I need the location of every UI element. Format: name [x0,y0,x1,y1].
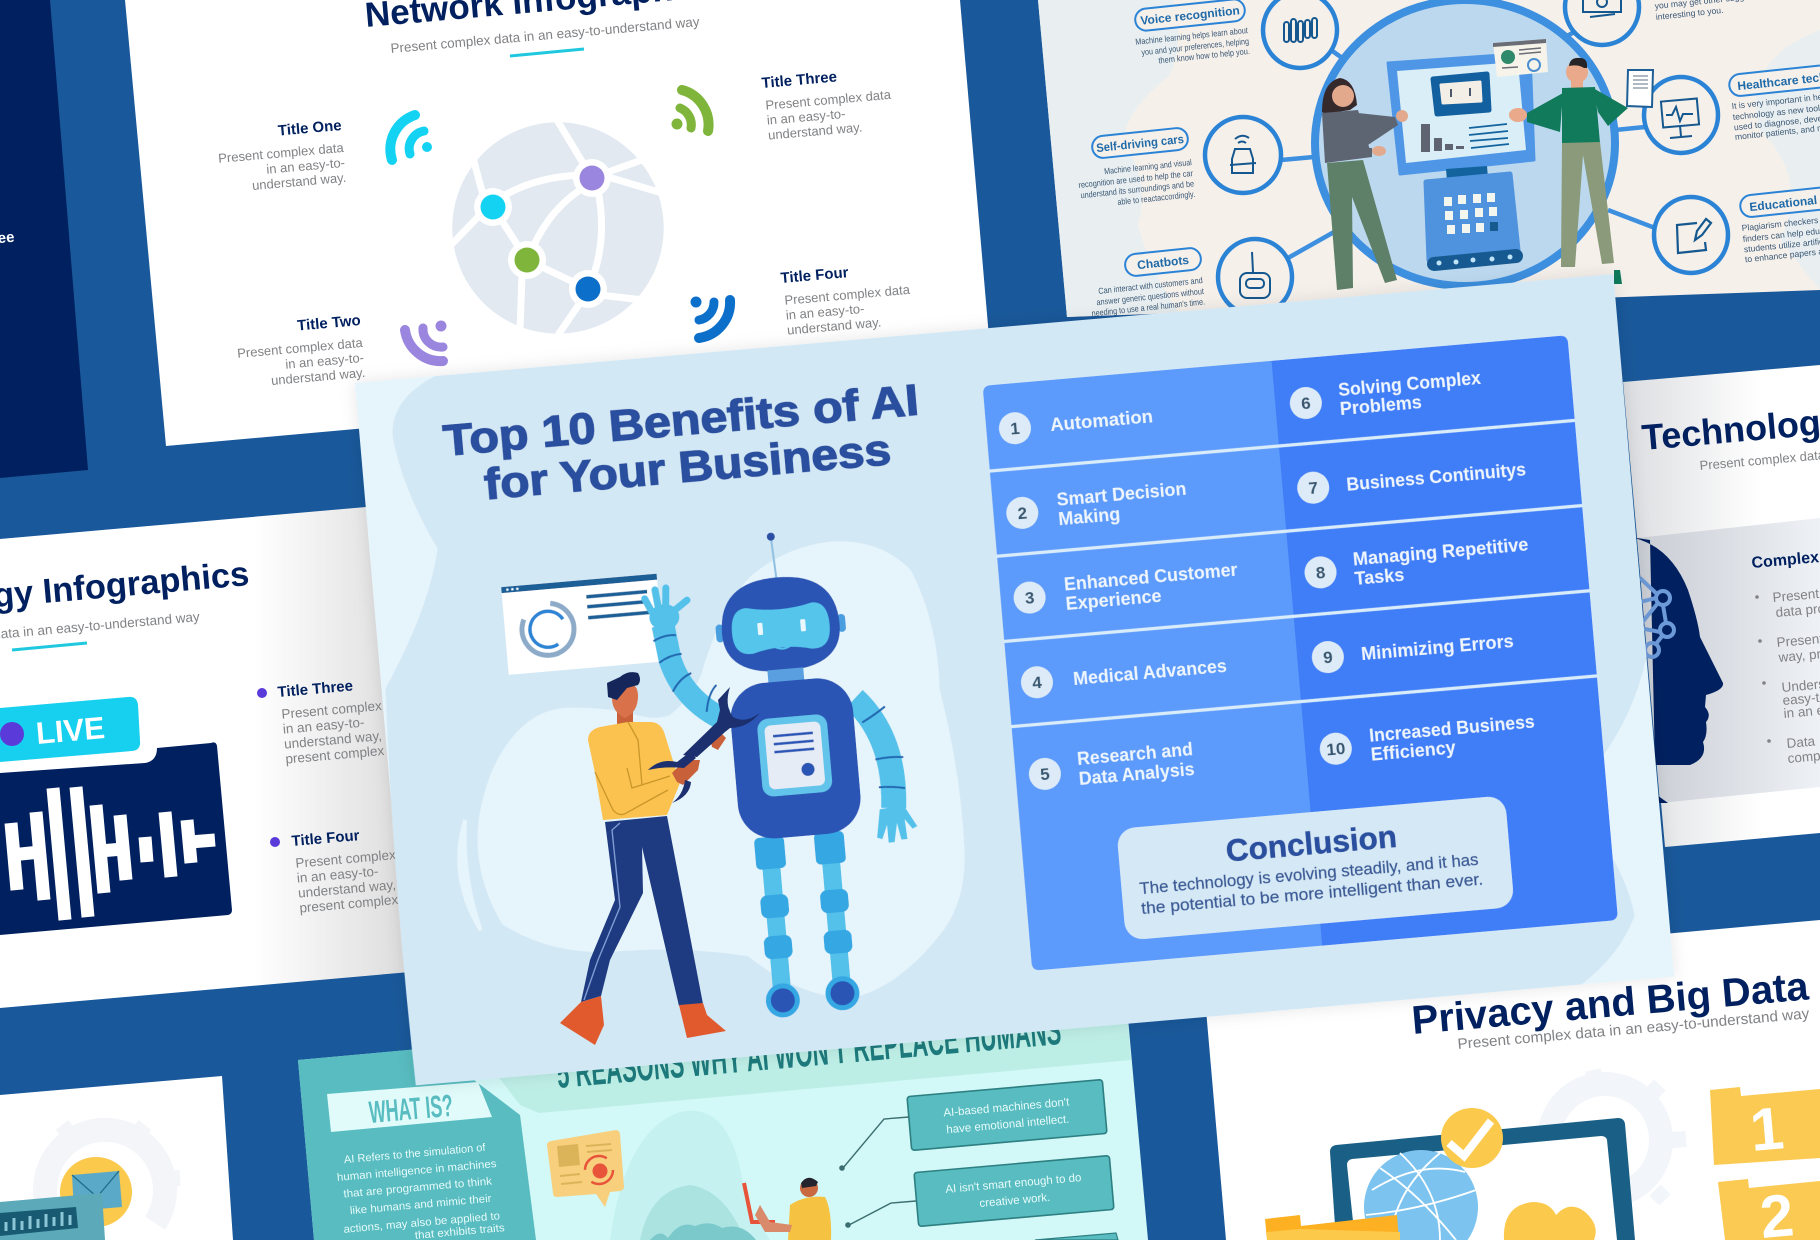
icon: gear [45,1125,180,1223]
text block: title four: understand way. [786,314,882,338]
item 7: Business Continuitys [1346,459,1527,495]
connectors [1281,30,1655,258]
icon: chatbot [1218,239,1292,315]
text block: title one: understand way. [251,170,347,193]
text block: title four left [270,821,431,916]
label: what is [327,1082,492,1132]
label: what is: WHAT IS? [368,1088,454,1130]
text block: title two: Title Two [296,312,361,335]
main circle [1315,0,1615,286]
item 6: Solving Complex [1337,368,1482,400]
item 5 [1027,739,1195,793]
callout: creative work: creative work. [979,1192,1051,1210]
globe [1364,1150,1478,1240]
text block: what is: like humans and mimic their [349,1193,492,1217]
accent underline [510,49,584,56]
panel: bottom left slide [0,1076,233,1240]
text block: title three: understand way. [767,119,863,143]
icon: laptop with globe [1330,1118,1635,1240]
text: self-driving body [1077,157,1196,211]
panel: network infographic slide [125,0,992,446]
text: self-driving body: recognition are used to help the car [1078,168,1193,190]
text block: title three left: in an easy-to- [282,715,365,737]
label: chatbots [1124,247,1202,277]
icon: small folder [1265,1215,1400,1240]
upper hand [710,732,726,750]
text block: title one [216,117,348,196]
item 4 [1020,650,1228,700]
icon: cyan signal [390,115,432,160]
subtitle: network: Present complex data in an easy-to-understand way [390,14,700,56]
item 8: Tasks [1354,565,1405,589]
item 2: Making [1058,504,1121,529]
label: healthcare technology [1728,61,1820,97]
text block: title two: in an easy-to- [285,350,364,372]
item 2 [1005,479,1189,534]
panel: technology infographics slide left [0,507,431,1008]
heart [1504,1202,1596,1240]
label: chatbots: Chatbots [1136,253,1190,272]
text: chatbots body [1089,275,1206,318]
text block: title three: Title Three [761,68,838,92]
panel: main infographic card [353,274,1674,1086]
text block: title three: in an easy-to- [766,106,846,128]
item 2: 2 [1017,504,1028,523]
illustration: person with laptop [744,1178,831,1240]
cloud dark [650,1223,756,1240]
panel: privacy and big data slide [1203,920,1820,1240]
text: recommendation body [1654,0,1790,22]
item 2: Smart Decision [1056,479,1187,510]
folder: number 2 [1718,1179,1820,1240]
text block: title four left: in an easy-to- [296,864,379,886]
text: self-driving body: understand its surroundings and be [1080,178,1195,200]
callout: conclusion [1116,795,1515,941]
badge: live: LIVE [35,710,106,751]
illustration backdrop blob [454,532,977,1029]
item 9 [1311,625,1515,674]
item 7: 7 [1308,478,1319,498]
item 1: 1 [1009,419,1021,439]
text: voice recognition body: you and your preferences, helping [1141,36,1250,57]
text: self-driving body: Machine learning and visual [1104,157,1192,176]
callout: conclusion: The technology is evolving steadily, and it has [1139,851,1479,898]
title [441,376,925,512]
text block: title four: Present complex data [784,282,911,308]
item 10: Increased Business [1368,712,1535,746]
text: chatbots body: answer generic questions without [1096,286,1205,307]
icon: check badge [1441,1108,1503,1168]
text block: title four [780,259,914,338]
icon: education pen [1654,197,1728,273]
icon: recommendation tv [1565,0,1639,45]
text block: title four: Title Four [780,264,849,287]
text: voice recognition body: Machine learning helps learn about [1135,25,1249,47]
icon: head silhouette [1630,537,1723,803]
icon: audio wave panel [0,742,232,935]
icon: gear [1549,1070,1686,1200]
left shoe [560,996,604,1045]
illustration: dashboard card [501,574,664,675]
icon: idea card [547,1130,624,1207]
item 4: Medical Advances [1072,656,1228,689]
text: voice recognition body [1135,25,1251,68]
title: Top 10 Benefits of AI [441,376,921,466]
wrench [648,687,760,803]
icon: blue signal [690,296,730,338]
text block: title three: Present complex data [765,87,892,113]
callout: creative work: AI isn't smart enough to do [945,1172,1082,1196]
label: voice recognition [1134,0,1246,32]
callout: third reason [1035,1233,1118,1240]
item 5: 5 [1039,765,1050,784]
badge: live [0,697,140,762]
text: chatbots body: Can interact with customers and [1098,275,1203,296]
hair [607,672,640,700]
side column [298,1045,536,1240]
label: self-driving cars: Self-driving cars [1096,132,1185,155]
item 1 [998,400,1154,446]
text block: title three left: present complex data [285,740,415,767]
header band [474,985,1131,1113]
text block: title one: Title One [277,117,342,140]
item 5: Data Analysis [1078,759,1195,789]
label: voice recognition: Voice recognition [1140,3,1240,28]
text block: what is [337,1142,506,1240]
text: self-driving body: able to reactaccordingly. [1117,189,1196,207]
text block: title four left: Present complex data [295,844,427,871]
item 8: 8 [1315,563,1326,583]
subtitle: privacy: Present complex data in an easy-to-understand way [1457,1005,1811,1053]
panel: navy slide far left [0,0,88,478]
item 3: Experience [1065,586,1162,614]
illustration: kiosk robot [1388,39,1548,266]
face [612,683,638,718]
text block: title two [235,312,367,391]
icon: mail badge [60,1157,132,1227]
text block: what is: that are programmed to think [343,1175,493,1200]
heading: privacy: Privacy and Big Data [1410,964,1811,1043]
text block: complex list: Data [1786,734,1816,751]
text block: title three left: Present complex data [281,695,413,722]
item 6: Problems [1339,392,1423,419]
item 3: 3 [1024,588,1035,608]
chart: teal bar panel [0,1193,105,1240]
text block: complex list: Complex [1751,549,1820,572]
panel: benefits list [982,335,1618,971]
icon: network globe [451,120,664,335]
callout: emotional intellect: have emotional intellect. [946,1114,1070,1136]
item 6 [1288,368,1483,423]
illustration: man [1509,58,1653,284]
text block: complex list [1751,549,1820,766]
item 10: Efficiency [1370,737,1456,765]
text: recommendation body: interesting to you. [1655,5,1724,22]
decorative hills [610,1111,770,1240]
illustration: person with wrench [560,672,760,1045]
sweater folds [595,722,670,815]
callout: emotional intellect: AI-based machines don't [943,1096,1071,1120]
label: educational tools [1739,185,1820,218]
text block: title four left: Title Four [291,827,360,850]
text: healthcare body [1731,90,1820,142]
text: education body [1741,213,1820,264]
robot hand raised [644,586,689,632]
lower hand [672,760,700,785]
callout: emotional intellect [839,1080,1107,1171]
trousers [581,816,703,1006]
heading: reasons: 5 REASONS WHY AI WON'T REPLACE HUMANS [555,1006,1063,1097]
text block: title three left: Title Three [277,677,354,701]
item 10 [1318,712,1537,769]
text block: title four: in an easy-to- [785,301,865,323]
item 6: 6 [1300,394,1311,413]
illustration: robot [640,522,933,1026]
folder: number 1: 1 [1747,1094,1786,1164]
accent underline [12,643,87,650]
robot hand lowered [875,804,919,844]
cloud [640,1185,745,1240]
text block: what is: AI Refers to the simulation of [343,1142,487,1166]
text block: title four left: understand way, [297,877,396,901]
decorative crescent [455,820,481,932]
icon: voice [1263,0,1337,68]
text block: title three [761,64,895,143]
item 9: 9 [1322,648,1333,667]
right shoe [679,1003,726,1038]
folder: number 1 [1710,1087,1820,1165]
icon: green signal [672,90,709,131]
item 8: Managing Repetitive [1352,534,1529,570]
sweater [588,722,680,820]
panel: technology slide right [1623,365,1820,847]
text block: title one: Present complex data [218,140,345,166]
item 4: 4 [1031,673,1043,693]
text: chatbots body: needing to use a real human's time. [1091,296,1205,318]
title: for Your Business [482,425,893,509]
text block: title two: understand way. [270,365,366,388]
icon: self-driving car [1205,117,1281,193]
icon: purple signal [405,320,446,361]
text block: title three left: understand way, [283,728,382,752]
trouser stripe [584,823,620,1000]
icon: healthcare monitor [1644,77,1718,153]
text block: what is: human intelligence in machines [337,1158,497,1184]
text: voice recognition body: them know how to help you. [1158,46,1250,65]
text block: title two: Present complex data [237,335,364,361]
panel: reasons AI slide [298,985,1148,1240]
callout: creative work [845,1156,1114,1228]
background blob [353,274,1674,1086]
item 9: Minimizing Errors [1360,631,1514,664]
item 8 [1303,534,1531,593]
neck [617,708,633,724]
text block: title one: in an easy-to- [266,155,345,177]
item 3: Enhanced Customer [1063,560,1238,595]
text block: what is: actions, may also be applied to [343,1210,500,1236]
illustration: woman [1322,78,1408,290]
item 5: Research and [1076,739,1194,769]
text block: title three left [257,672,417,767]
callout: conclusion: the potential to be more intelligent than ever. [1141,871,1484,918]
callout: conclusion: Conclusion [1224,818,1398,869]
item 1: Automation [1049,406,1154,435]
item 7 [1296,453,1527,505]
text block: title four left: present complex data [299,889,429,916]
item 10: 10 [1326,739,1346,760]
panel: machine learning slide top right [1038,0,1820,318]
item 3 [1012,560,1240,618]
